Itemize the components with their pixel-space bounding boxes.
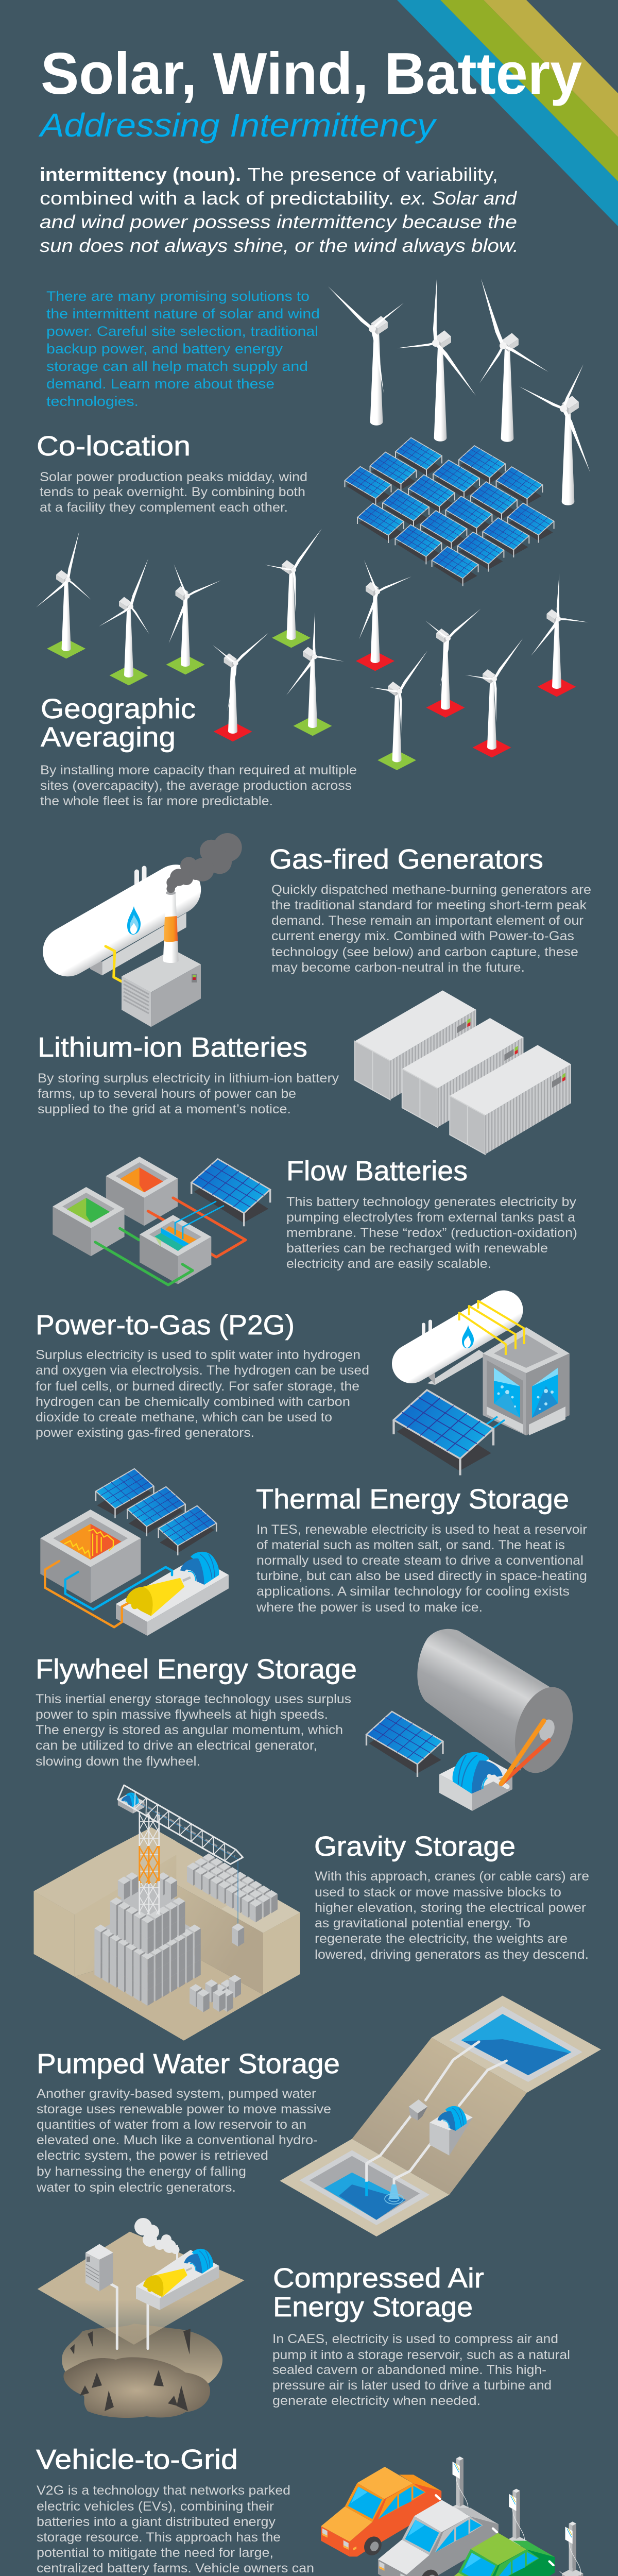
text: co-location: at a facility they complement each other.	[40, 500, 288, 515]
text: flow batteries: electricity and are easily scalable.	[286, 1257, 491, 1271]
text: geographic averaging	[40, 763, 357, 808]
text: lithium-ion batteries: farms, up to several hours of power can be	[38, 1087, 296, 1101]
text: vehicle-to-grid: centralized battery farms. Vehicle owners can	[37, 2561, 314, 2575]
text: thermal energy storage: of material such as molten salt, or sand. The heat is	[256, 1538, 565, 1552]
text: flow batteries: batteries can be recharged with renewable	[286, 1241, 548, 1256]
text: gravity storage: lowered, driving generators as they descend.	[315, 1947, 589, 1962]
text: gas-fired generators: current energy mix. Combined with Power-to-Gas	[271, 929, 574, 943]
text: compressed air energy storage	[272, 2332, 570, 2408]
text: gravity storage	[315, 1869, 589, 1962]
heading: flywheel energy storage: Flywheel Energy Storage	[36, 1654, 357, 1685]
intro text: power. Careful site selection, traditional	[46, 324, 318, 339]
heading: compressed air energy storage: Energy Storage	[273, 2292, 473, 2323]
text: thermal energy storage: In TES, renewable electricity is used to heat a reservoir	[256, 1522, 587, 1537]
text: pumped water storage: electric system, the power is retrieved	[37, 2148, 268, 2163]
heading: vehicle-to-grid: Vehicle-to-Grid	[36, 2444, 238, 2475]
text: power-to-gas: for fuel cells, or burned directly. For safer storage, the	[36, 1379, 359, 1394]
definition of intermittency: sun does not always shine, or the wind always blow.	[40, 235, 519, 256]
intro text: storage can all help match supply and	[46, 359, 308, 374]
text: geographic averaging: the whole fleet is far more predictable.	[40, 794, 273, 808]
text: compressed air energy storage: pump it into a storage reservoir, such as a natural	[272, 2348, 570, 2362]
illustration: gas-fired generator	[68, 833, 242, 1027]
heading: geographic averaging: Geographic	[41, 693, 196, 724]
text: gas-fired generators: demand. These remain an important element of our	[271, 913, 583, 928]
subtitle: Addressing Intermittency	[38, 107, 437, 144]
decorative stripes	[397, 0, 618, 226]
illustration: power-to-gas	[393, 1301, 570, 1476]
text: thermal energy storage: applications. A similar technology for cooling exists	[256, 1584, 570, 1599]
definition of intermittency: ex. Solar and	[400, 188, 517, 209]
text: flow batteries: This battery technology generates electricity by	[286, 1195, 577, 1209]
text: pumped water storage: by harnessing the energy of falling	[37, 2164, 246, 2179]
text: pumped water storage: Another gravity-based system, pumped water	[37, 2087, 316, 2101]
heading: compressed air energy storage	[273, 2263, 484, 2323]
heading: compressed air energy storage: Compressed Air	[273, 2263, 484, 2294]
illustration: flow batteries	[53, 1157, 270, 1285]
text: pumped water storage	[36, 2087, 331, 2195]
text: vehicle-to-grid: potential to mitigate the need for large,	[37, 2546, 273, 2560]
heading: gravity storage: Gravity Storage	[314, 1831, 516, 1862]
heading: gas-fired generators: Gas-fired Generators	[269, 844, 543, 875]
text: gas-fired generators: Quickly dispatched methane-burning generators are	[271, 883, 591, 897]
text: flywheel energy storage: can be utilized to drive an electrical generator,	[36, 1738, 317, 1753]
text: gas-fired generators: the traditional standard for meeting short-term peak	[271, 898, 587, 912]
text: vehicle-to-grid: V2G is a technology that networks parked	[37, 2483, 290, 2498]
text: co-location	[40, 470, 307, 515]
text: lithium-ion batteries: By storing surplus electricity in lithium-ion battery	[38, 1071, 339, 1086]
text: vehicle-to-grid: electric vehicles (EVs), combining their	[37, 2499, 274, 2514]
text: geographic averaging: By installing more capacity than required at multiple	[40, 763, 357, 777]
heading: thermal energy storage: Thermal Energy Storage	[256, 1484, 569, 1515]
text: compressed air energy storage: generate electricity when needed.	[272, 2394, 480, 2408]
text: pumped water storage: elevated one. Much like a conventional hydro-	[37, 2133, 318, 2147]
text: power-to-gas: dioxide to create methane, which can be used to	[36, 1410, 332, 1425]
definition of intermittency	[40, 164, 519, 256]
text: flywheel energy storage: The energy is stored as angular momentum, which	[36, 1723, 343, 1737]
text: power-to-gas: Surplus electricity is used to split water into hydrogen	[36, 1348, 360, 1362]
text: lithium-ion batteries	[38, 1071, 339, 1116]
illustration: lithium-ion battery containers	[355, 990, 571, 1154]
text: flow batteries: pumping electrolytes from external tanks past a	[286, 1210, 575, 1225]
definition of intermittency: The presence of variability,	[248, 164, 498, 185]
text: thermal energy storage	[256, 1522, 587, 1615]
text: vehicle-to-grid	[37, 2483, 358, 2576]
heading: power-to-gas: Power-to-Gas (P2G)	[36, 1310, 295, 1341]
heading: pumped water storage: Pumped Water Storage	[37, 2048, 340, 2079]
illustration: co-location turbines and solar array	[326, 278, 593, 586]
text: gravity storage: higher elevation, storing the electrical power	[315, 1901, 586, 1915]
intro text	[46, 289, 320, 409]
text: pumped water storage: quantities of water from a low reservoir to an	[37, 2117, 306, 2132]
text: power-to-gas	[36, 1348, 369, 1440]
text: gravity storage: used to stack or move massive blocks to	[315, 1885, 561, 1900]
text: gas-fired generators	[271, 883, 591, 975]
text: thermal energy storage: where the power is used to make ice.	[256, 1600, 483, 1615]
text: co-location: tends to peak overnight. By combining both	[40, 485, 305, 499]
heading: geographic averaging	[41, 693, 196, 753]
title: Solar, Wind, Battery	[41, 41, 582, 107]
text: flywheel energy storage: power to spin massive flywheels at high speeds.	[36, 1707, 328, 1722]
text: power-to-gas: hydrogen can be chemically combined with carbon	[36, 1395, 350, 1409]
text: flywheel energy storage: This inertial energy storage technology uses surplus	[36, 1692, 351, 1706]
illustration: flywheel	[367, 1629, 583, 1811]
text: thermal energy storage: turbine, but can also be used directly in space-heating	[256, 1569, 587, 1583]
illustration: geographic averaging turbines	[36, 528, 589, 770]
text: gas-fired generators: technology (see below) and carbon capture, these	[271, 945, 578, 959]
illustration: compressed air energy storage	[38, 2218, 244, 2418]
text: lithium-ion batteries: supplied to the grid at a moment’s notice.	[38, 1102, 291, 1116]
text: pumped water storage: storage uses renewable power to move massive	[37, 2102, 331, 2116]
definition of intermittency: and wind power possess intermittency because the	[40, 211, 517, 232]
text: compressed air energy storage: pressure air is later used to drive a turbine and	[272, 2378, 552, 2393]
text: flywheel energy storage: slowing down the flywheel.	[36, 1754, 200, 1769]
text: gravity storage: as gravitational potential energy. To	[315, 1916, 530, 1930]
text: gas-fired generators: may become carbon-neutral in the future.	[271, 960, 525, 975]
text: flow batteries: membrane. These “redox” (reduction-oxidation)	[286, 1226, 577, 1240]
text: co-location: Solar power production peaks midday, wind	[40, 470, 307, 484]
text: vehicle-to-grid: batteries into a giant distributed energy	[37, 2515, 276, 2529]
text: flow batteries	[286, 1195, 577, 1271]
intro text: demand. Learn more about these	[46, 376, 274, 392]
text: thermal energy storage: normally used to create steam to drive a conventional	[256, 1553, 583, 1568]
text: power-to-gas: and oxygen via electrolysis. The hydrogen can be used	[36, 1363, 369, 1378]
intro text: the intermittent nature of solar and wind	[46, 306, 320, 321]
intro text: technologies.	[46, 394, 139, 409]
text: compressed air energy storage: sealed cavern or abandoned mine. This high-	[272, 2363, 546, 2377]
illustration: electric vehicles and chargers	[321, 2456, 583, 2576]
illustration: pumped water storage	[280, 1996, 601, 2236]
text: vehicle-to-grid: storage resource. This approach has the	[37, 2530, 281, 2545]
intro text: There are many promising solutions to	[46, 289, 310, 304]
text: flywheel energy storage	[36, 1692, 351, 1769]
text: gravity storage: regenerate the electricity, the weights are	[315, 1931, 568, 1946]
text: pumped water storage: water to spin electric generators.	[36, 2180, 236, 2195]
illustration: thermal energy storage	[40, 1469, 229, 1636]
heading: lithium-ion batteries: Lithium-ion Batteries	[38, 1032, 307, 1063]
intro text: backup power, and battery energy	[46, 341, 283, 357]
text: gravity storage: With this approach, cranes (or cable cars) are	[315, 1869, 589, 1884]
text: geographic averaging: sites (overcapacity), the average production across	[40, 778, 352, 793]
illustration: gravity storage crane	[34, 1785, 300, 2041]
heading: geographic averaging: Averaging	[41, 722, 176, 753]
text: power-to-gas: power existing gas-fired generators.	[36, 1426, 254, 1440]
definition of intermittency: intermittency (noun).	[40, 164, 241, 185]
heading: co-location: Co-location	[37, 431, 191, 462]
definition of intermittency: combined with a lack of predictability.	[40, 188, 394, 209]
text: compressed air energy storage: In CAES, electricity is used to compress air and	[272, 2332, 558, 2346]
heading: flow batteries: Flow Batteries	[286, 1156, 468, 1187]
